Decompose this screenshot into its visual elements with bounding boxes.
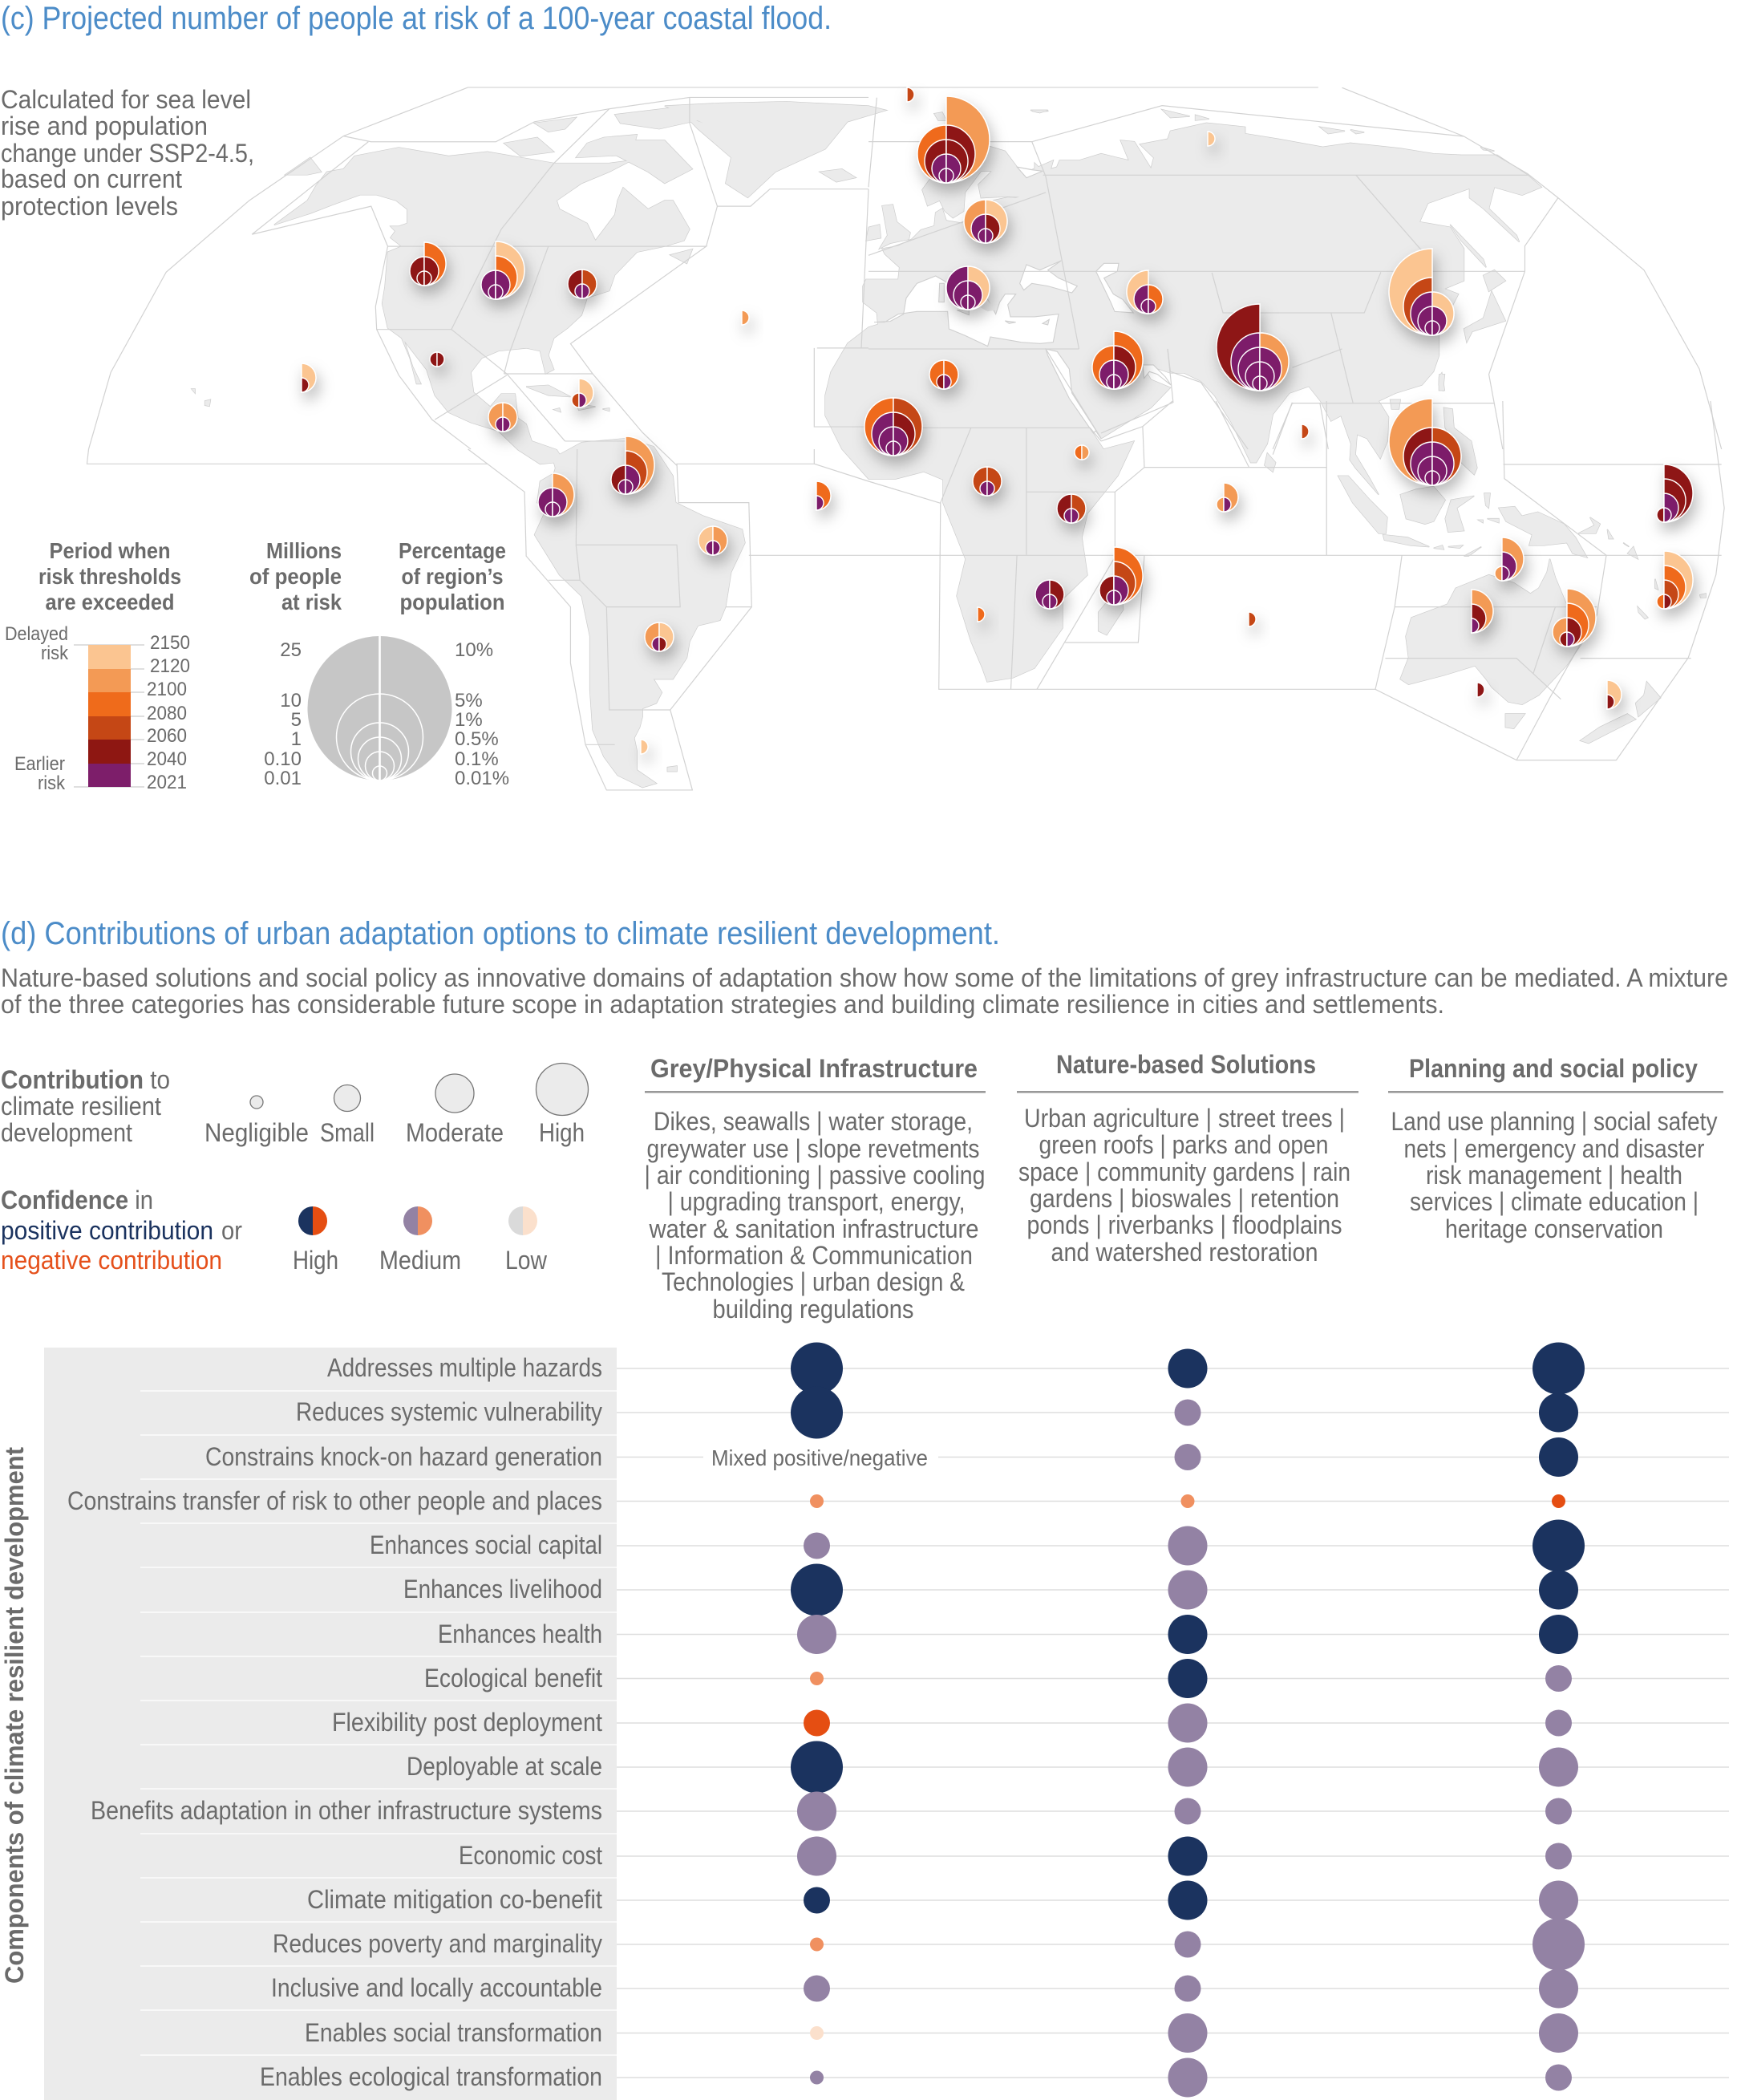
- note: calculation basis: [1, 85, 254, 221]
- millions labels: 5: [291, 709, 302, 731]
- symbol: Madagascar: [1099, 547, 1143, 605]
- millions labels: 0.01: [264, 768, 302, 789]
- symbol: north-east South America: [698, 526, 727, 555]
- contribution labels: Moderate: [406, 1118, 504, 1147]
- millions labels: [264, 639, 302, 789]
- symbol: eastern Africa: [1057, 494, 1086, 523]
- symbol: Arctic: [907, 87, 914, 102]
- percentage labels: 0.5%: [455, 728, 499, 750]
- percentage labels: 0.01%: [455, 768, 509, 789]
- legend title: period: risk thresholds: [38, 564, 181, 589]
- contribution legend title: climate resilient: [1, 1092, 161, 1121]
- row: Economic cost: [459, 1837, 1729, 1875]
- symbol: eastern North America: [568, 270, 597, 298]
- symbol: New Zealand: [1607, 680, 1622, 709]
- row: Enables ecological transformation: [260, 2058, 1729, 2097]
- contribution legend title: [1, 1065, 170, 1147]
- year labels: 2080: [147, 703, 187, 724]
- matrix: row label panel: [44, 1348, 617, 2100]
- column: grey/physical infrastructure: building regulations: [712, 1295, 914, 1324]
- year labels: 2100: [147, 679, 187, 700]
- percentage labels: 5%: [455, 690, 483, 711]
- column: nature-based solutions: space | community gardens | rain: [1018, 1157, 1350, 1186]
- legend title: percentage: [399, 538, 506, 614]
- legend title: period: [38, 538, 181, 614]
- symbol: South-East Asia: [1389, 399, 1461, 485]
- legend title: period: Period when: [50, 538, 170, 563]
- year labels: 2060: [147, 725, 187, 747]
- symbol: north-west South America: [538, 473, 574, 517]
- year labels: 2040: [147, 748, 187, 770]
- symbol: Sahara: [929, 360, 958, 389]
- column: grey/physical infrastructure: | air conditioning | passive cooling: [645, 1161, 985, 1190]
- row: Constrains transfer of risk: [67, 1486, 1729, 1515]
- column: nature-based solutions: gardens | bioswales | retention: [1030, 1184, 1339, 1213]
- symbol: northern Pacific islands: [1657, 464, 1693, 522]
- contribution labels: [204, 1118, 585, 1147]
- row: Economic cost: Economic cost: [459, 1841, 602, 1870]
- column: planning and social policy: risk management | health: [1426, 1161, 1682, 1190]
- row: Enhances livelihood: [403, 1564, 1729, 1616]
- column: nature-based solutions: ponds | riverbanks | floodplains: [1026, 1210, 1342, 1239]
- row: Constrains knock-on hazard generation: Constrains knock-on hazard generation: [205, 1442, 602, 1471]
- intro text: of the three categories has considerable future scope in adaptation strategies and building climate resilience in cities and settlements.: [1, 990, 1444, 1019]
- contribution labels: Small: [320, 1118, 375, 1147]
- percentage labels: [455, 639, 509, 789]
- symbol: eastern Europe: [964, 200, 1007, 243]
- year labels: [147, 632, 190, 793]
- row: Reduces systemic vulnerability: [296, 1386, 1729, 1439]
- legend: symbol size scale: [249, 538, 509, 789]
- row: Deployable at scale: [407, 1741, 1729, 1794]
- legend: confidence: [1, 1186, 548, 1275]
- note: calculation basis: protection levels: [1, 192, 178, 221]
- row: Climate mitigation co-benefit: Climate mitigation co-benefit: [307, 1885, 602, 1914]
- legend title: millions of people: at risk: [281, 590, 342, 614]
- row: Reduces systemic vulnerability: Reduces systemic vulnerability: [296, 1397, 602, 1426]
- world map: land masses and seas: [192, 102, 1706, 788]
- delayed and earlier risk labels: risk: [41, 643, 69, 664]
- contribution legend title: development: [1, 1118, 132, 1147]
- percentage labels: 10%: [455, 639, 493, 661]
- note: calculation basis: Calculated for sea level: [1, 85, 251, 114]
- row: Deployable at scale: Deployable at scale: [407, 1752, 602, 1781]
- column: grey/physical infrastructure: Technologies | urban design &: [662, 1267, 965, 1296]
- symbol: western Australia: [1472, 590, 1493, 633]
- map: regional boundary lines: [87, 87, 1724, 790]
- symbol: Mediterranean: [946, 266, 990, 310]
- symbol: southern Australia: [1477, 683, 1484, 697]
- symbol: southern Central America: [488, 403, 517, 432]
- column: nature-based solutions: and watershed restoration: [1051, 1238, 1318, 1267]
- symbol: southern South America: [641, 740, 648, 754]
- confidence legend title: positive contribution: [1, 1216, 213, 1245]
- row: Reduces poverty and marginality: Reduces poverty and marginality: [273, 1929, 602, 1958]
- confidence legend title: Confidence in: [1, 1186, 153, 1214]
- column: planning and social policy: nets | emergency and disaster: [1403, 1134, 1705, 1163]
- symbol: East Asia: [1389, 249, 1454, 335]
- year labels: 2150: [150, 632, 190, 654]
- symbol: North Atlantic: [742, 310, 749, 325]
- symbol: Bay of Bengal: [1302, 424, 1309, 439]
- year labels: 2021: [147, 772, 187, 793]
- symbol: western North America: [410, 242, 446, 286]
- column: grey/physical infrastructure: water & sanitation infrastructure: [649, 1214, 978, 1243]
- confidence labels: High: [293, 1246, 338, 1275]
- row: Ecological benefit: Ecological benefit: [424, 1664, 602, 1693]
- legend title: percentage: Percentage: [399, 538, 506, 563]
- row: Inclusive and locally accountable: Inclusive and locally accountable: [271, 1973, 602, 2002]
- millions labels: 10: [280, 690, 302, 711]
- column: nature-based solutions: Urban agriculture | street trees |: [1024, 1104, 1345, 1133]
- column: grey/physical infrastructure: | upgrading transport, energy,: [667, 1187, 966, 1216]
- row: Flexibility post deployment: [332, 1704, 1729, 1742]
- row: Enhances social capital: Enhances social capital: [370, 1530, 602, 1559]
- symbol: southern Pacific islands: [1657, 551, 1693, 609]
- symbol: equatorial Indian Ocean: [1217, 483, 1238, 512]
- row: Reduces poverty and marginality: [273, 1919, 1729, 1970]
- row: Enables social transformation: Enables social transformation: [305, 2018, 602, 2047]
- row: Enhances health: [438, 1615, 1729, 1654]
- column: planning and social policy: Planning and social policy: [1409, 1054, 1698, 1083]
- symbol: Horn of Africa: [1075, 445, 1089, 460]
- symbols: regional flood risk half-disks: [302, 87, 1693, 754]
- matrix: bubble rows: [67, 1343, 1729, 2097]
- intro text: [1, 963, 1728, 1019]
- confidence legend title: or: [221, 1216, 242, 1245]
- note: calculation basis: change under SSP2-4.5,: [1, 139, 254, 168]
- legend title: period: are exceeded: [45, 590, 175, 614]
- column: nature-based solutions: green roofs | parks and open: [1039, 1130, 1328, 1159]
- row: Benefits adaptation: Benefits adaptation in other infrastructure systems: [91, 1796, 602, 1825]
- symbol: northern Australia: [1495, 537, 1524, 581]
- column: grey/physical infrastructure: greywater use | slope revetments: [646, 1134, 980, 1163]
- symbol: Arabian Peninsula: [1092, 331, 1143, 389]
- column: grey/physical infrastructure: | Information & Communication: [655, 1241, 973, 1270]
- delayed and earlier risk labels: Earlier: [14, 753, 65, 775]
- symbol: Russian Far North: [1208, 132, 1215, 146]
- symbol: northern Europe: [917, 96, 990, 183]
- year labels: 2120: [150, 655, 190, 677]
- column: planning and social policy: [1388, 1054, 1723, 1243]
- confidence labels: Low: [505, 1246, 548, 1275]
- row: Flexibility post deployment: Flexibility post deployment: [332, 1708, 602, 1737]
- symbol: south-east Africa: [1035, 580, 1064, 609]
- delayed and earlier risk labels: Delayed: [5, 623, 68, 645]
- symbol: North Pacific: [302, 363, 316, 392]
- column: grey/physical infrastructure: [645, 1054, 986, 1324]
- row: Addresses multiple hazards: Addresses multiple hazards: [327, 1353, 602, 1382]
- millions labels: 25: [280, 639, 302, 661]
- row: Enables ecological transformation: Enables ecological transformation: [260, 2062, 602, 2091]
- contribution circles: [250, 1064, 589, 1115]
- confidence half circles: [298, 1206, 537, 1235]
- column: nature-based solutions: [1017, 1050, 1358, 1267]
- column: planning and social policy: heritage conservation: [1445, 1214, 1663, 1243]
- millions labels: 0.10: [264, 748, 302, 770]
- percentage labels: 1%: [455, 709, 483, 731]
- contribution labels: Negligible: [204, 1118, 309, 1147]
- row: Enhances health: Enhances health: [438, 1620, 602, 1648]
- legend title: millions of people: of people: [249, 564, 342, 589]
- note: calculation basis: based on current: [1, 164, 182, 193]
- row: Enables social transformation: [305, 2013, 1729, 2053]
- row: Constrains transfer of risk: Constrains transfer of risk to other people and places: [67, 1486, 602, 1515]
- symbol: West Central Asia: [1127, 270, 1163, 314]
- column: nature-based solutions: Nature-based Solutions: [1056, 1050, 1316, 1079]
- symbol: eastern Australia: [1553, 589, 1596, 647]
- legend title: percentage: population: [399, 590, 505, 614]
- symbol: Caribbean: [572, 379, 593, 407]
- symbol: southern Indian Ocean: [1249, 612, 1256, 626]
- column: grey/physical infrastructure: Grey/Physical Infrastructure: [650, 1054, 978, 1083]
- title: panel c heading: (c) Projected number of people at risk of a 100-year coastal flood.: [1, 1, 832, 36]
- delayed and earlier risk labels: risk: [38, 772, 66, 794]
- nested size circles: [308, 636, 452, 780]
- colour bar: [88, 645, 131, 787]
- note: calculation basis: rise and population: [1, 111, 208, 140]
- symbol: South Asia: [1217, 304, 1289, 391]
- symbol: northern Central America: [430, 352, 444, 367]
- confidence legend title: negative contribution: [1, 1246, 222, 1275]
- row: Benefits adaptation: [91, 1792, 1729, 1830]
- symbol: central Africa: [973, 467, 1002, 496]
- symbol: central North America: [481, 241, 524, 299]
- legend title: millions of people: [249, 538, 342, 614]
- contribution labels: High: [539, 1118, 585, 1147]
- row: Enhances social capital: [370, 1519, 1729, 1572]
- legend title: percentage: of region’s: [401, 564, 504, 589]
- symbol: south-east South America: [645, 622, 674, 651]
- legend: contribution sizes: [1, 1064, 589, 1147]
- row: Climate mitigation co-benefit: [307, 1880, 1729, 1920]
- symbol: western Africa: [864, 398, 922, 456]
- percentage labels: 0.1%: [455, 748, 499, 770]
- title: panel d heading: (d) Contributions of urban adaptation options to climate resilient development.: [1, 916, 1000, 951]
- delayed and earlier risk labels: [5, 623, 69, 794]
- row: Constrains knock-on hazard generation: [205, 1437, 1729, 1477]
- row: Constrains knock-on hazard generation: Mixed positive/negative: [711, 1445, 928, 1470]
- column: grey/physical infrastructure: Dikes, seawalls | water storage,: [654, 1107, 973, 1136]
- confidence legend title: [1, 1186, 242, 1275]
- millions labels: 1: [291, 728, 302, 750]
- column: planning and social policy: services | climate education |: [1410, 1187, 1699, 1216]
- contribution legend title: Contribution to: [1, 1065, 170, 1094]
- row: Ecological benefit: [424, 1659, 1729, 1698]
- legend: risk period colour scale: [5, 538, 190, 794]
- row: Addresses multiple hazards: [327, 1343, 1729, 1394]
- symbol: equatorial Atlantic: [816, 481, 831, 510]
- row: Enhances livelihood: Enhances livelihood: [403, 1575, 602, 1603]
- symbol: northern South America: [611, 436, 654, 494]
- vertical axis title: Components of climate resilient development: [0, 1447, 29, 1984]
- confidence labels: [293, 1246, 548, 1275]
- legend title: millions of people: Millions: [266, 538, 342, 563]
- row: Inclusive and locally accountable: [271, 1968, 1729, 2009]
- symbol: south-west Africa: [978, 607, 985, 622]
- confidence labels: Medium: [379, 1246, 461, 1275]
